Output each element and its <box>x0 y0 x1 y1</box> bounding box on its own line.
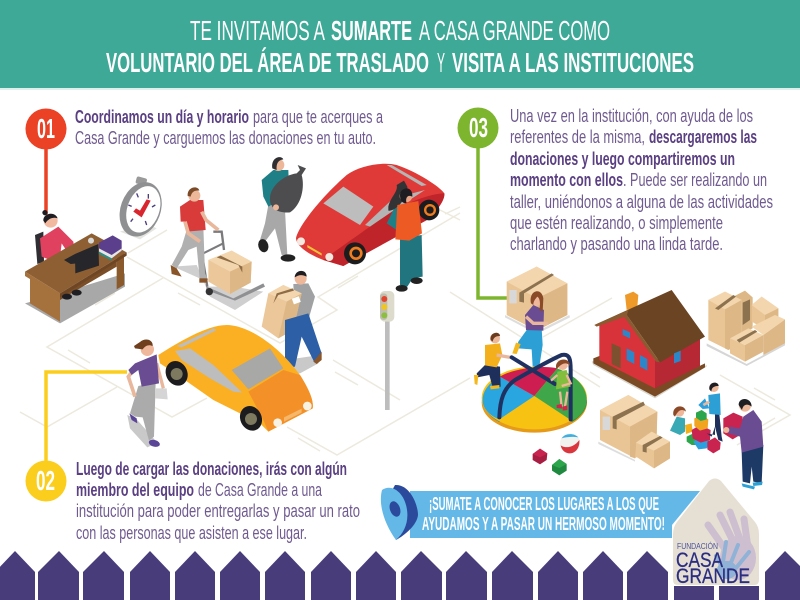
title: VOLUNTARIO DEL ÁREA DE TRASLADO <box>106 47 429 78</box>
icon: woman walking <box>127 339 168 448</box>
logo: Fundación Casa Grande: CASA <box>676 549 723 572</box>
icon: man carrying trash bag <box>257 157 306 262</box>
text: step 01: para que te acerques a <box>253 107 384 127</box>
icon: desk with woman at computer <box>25 210 127 323</box>
text: step 03: que estén realizando, o simplemente <box>510 213 723 233</box>
text: step 02: institución para poder entregarlas y pasar un rato <box>76 501 360 521</box>
badge 01 <box>26 108 66 150</box>
badge 02: 02 <box>36 465 55 496</box>
icon: children with blocks <box>670 383 723 453</box>
icon: boy running <box>474 333 510 389</box>
logo: Fundación Casa Grande: FUNDACIÓN <box>677 542 718 551</box>
icon: box behind woman <box>505 267 570 334</box>
icon: woman playing <box>512 291 548 367</box>
text: step 03: charlando y pasando una linda tarde. <box>510 234 723 254</box>
icon: man with hand truck and box <box>171 187 265 310</box>
badge 01: 01 <box>37 113 55 144</box>
logo: Fundación Casa Grande <box>673 478 759 588</box>
icon: map pin <box>381 485 418 540</box>
header band <box>0 0 800 90</box>
icon: yellow car <box>158 325 313 434</box>
fence of purple houses <box>0 551 800 600</box>
logo: Fundación Casa Grande: GRANDE <box>676 565 750 588</box>
icon: boxes bottom centre <box>598 395 670 468</box>
icon: traffic light <box>380 291 394 410</box>
text: step 02: miembro del equipo <box>76 480 194 500</box>
icon: stacked boxes top right <box>707 291 785 366</box>
text: step 03 <box>510 106 773 254</box>
step 03 connector <box>478 145 507 298</box>
badge 02 <box>26 460 66 502</box>
text: step 01: Casa Grande y carguemos las donaciones en tu auto. <box>75 128 376 148</box>
icon: toy cubes and ball <box>533 433 580 475</box>
illustration: step 02 scene <box>127 313 322 448</box>
icon: red house <box>592 290 707 398</box>
text: step 02: con las personas que asisten a ese lugar. <box>76 523 307 543</box>
callout banner <box>381 485 700 540</box>
icon: man in orange vest loading bag <box>387 181 423 292</box>
icon: man carrying cardboard box <box>262 271 315 338</box>
badge 03 <box>458 108 498 148</box>
text: step 03: referentes de la misma, <box>510 127 645 147</box>
step 02 connector <box>46 372 127 462</box>
illustration: step 01 scene <box>25 157 444 410</box>
badge 03: 03 <box>469 112 488 143</box>
title: SUMARTE <box>331 15 412 46</box>
title: Y <box>437 47 445 78</box>
icon: girl on carousel <box>551 359 571 411</box>
icon: merry-go-round <box>482 367 587 433</box>
text: step 03: momento con ellos <box>510 170 623 190</box>
text: step 02 <box>76 459 360 543</box>
icon: stopwatch <box>112 176 169 242</box>
title <box>106 15 694 78</box>
step 01 connector <box>44 145 48 215</box>
text: step 02: de Casa Grande a una <box>198 480 323 500</box>
icon: red car <box>296 164 444 266</box>
text: step 01 <box>75 107 384 148</box>
text: step 02: Luego de cargar las donaciones, irás con algún <box>76 459 347 479</box>
icon: man lifting red block <box>723 399 763 489</box>
text: step 01: Coordinamos un día y horario <box>75 107 249 127</box>
title: A CASA GRANDE COMO <box>419 15 610 46</box>
title: TE INVITAMOS A <box>190 15 325 46</box>
street map lines <box>20 207 790 455</box>
icon: merry-go-round bars <box>499 355 571 419</box>
icon: lower body of box man <box>285 313 322 373</box>
icon: hands <box>708 512 756 580</box>
illustration: step 03 scene <box>474 267 785 489</box>
